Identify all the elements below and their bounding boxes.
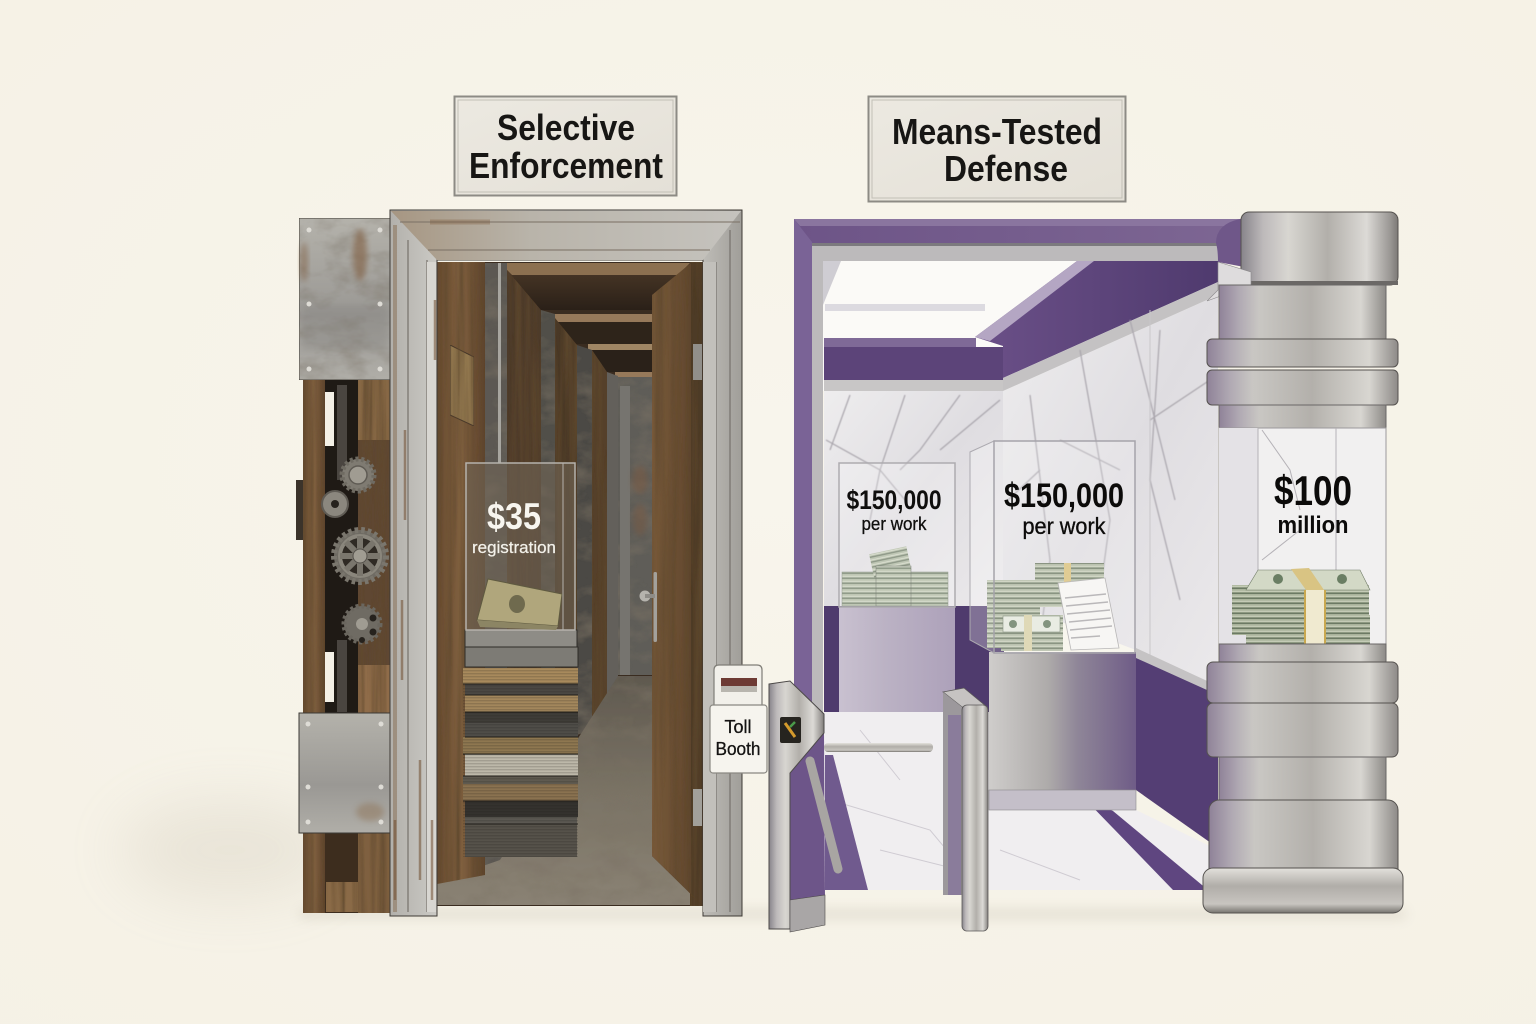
ground shadows (120, 800, 1405, 918)
glass case (839, 463, 955, 607)
upper neck (1219, 285, 1386, 339)
heading sign: Selective Enforcement: Selective (497, 107, 635, 148)
toll turnstile left body (769, 681, 933, 932)
metal plinth (465, 630, 578, 667)
money bundles (1232, 568, 1370, 655)
back money stacks (987, 563, 1104, 648)
exhibit: $150,000 per work large case (970, 441, 1136, 810)
open wooden door leaf (640, 262, 704, 906)
value label: per work (1022, 513, 1106, 539)
wooden backing and dark mechanism gap (296, 380, 390, 913)
back marble wall (824, 391, 1003, 607)
toll booth sign: Booth (716, 739, 760, 759)
corridor side walls and columns (485, 263, 618, 875)
panel: vault door edge with exposed gears (296, 218, 390, 913)
panel: weathered door frame (390, 210, 742, 916)
value label: $35 (487, 496, 541, 537)
skylight ceiling (823, 261, 1218, 391)
heading sign: Means-Tested Defense: Means-Tested (892, 111, 1102, 152)
value label (472, 496, 556, 557)
panel: marble lobby interior (823, 261, 1218, 890)
marble floor (824, 712, 1218, 890)
silver ceiling edge (1003, 282, 1218, 391)
value label (1004, 477, 1124, 539)
heading sign: Selective Enforcement: Enforcement (469, 145, 663, 186)
value label (1274, 467, 1352, 539)
value label: registration (472, 538, 556, 557)
bottom steel plate (299, 713, 390, 833)
money pile (842, 546, 948, 606)
front money stack (1001, 615, 1063, 651)
marble veins (826, 320, 1210, 640)
heading sign: Means-Tested Defense: Defense (944, 148, 1068, 189)
turnstile display (780, 717, 801, 743)
purple wedge joining frame (1216, 219, 1260, 270)
gears (322, 459, 386, 643)
value label: $150,000 (846, 485, 942, 515)
toll booth sign: Toll (724, 717, 752, 737)
value label: $100 (1274, 467, 1352, 514)
turnstile right post (943, 688, 988, 931)
glass case (466, 463, 575, 630)
left wood wall (437, 262, 485, 884)
turnstile lower arm (810, 761, 838, 869)
exhibit: $35 registration (463, 463, 578, 857)
panel: purple entrance frame (794, 219, 1240, 905)
value label (846, 485, 942, 534)
ceiling receding (500, 263, 690, 377)
heading sign: Selective Enforcement (454, 96, 676, 196)
pedestal (839, 607, 955, 712)
exhibit: $150,000 per work small case (839, 463, 955, 712)
concrete floor (437, 676, 702, 905)
upper bands (1207, 339, 1398, 428)
panel: old wooden corridor interior (436, 262, 704, 906)
value label: million (1278, 512, 1348, 539)
stack of worn books (463, 668, 578, 857)
heading sign: Means-Tested Defense (868, 96, 1126, 202)
column glass (1219, 428, 1386, 648)
far steel door (618, 377, 652, 675)
marble panel seam (1149, 310, 1151, 660)
right marble wall (1003, 295, 1218, 690)
purple ceiling beams (824, 261, 1218, 391)
purple wainscot (824, 606, 1218, 848)
base tiers (1203, 644, 1403, 913)
pedestal (989, 652, 1136, 810)
value label: per work (862, 514, 927, 534)
wall notice plank (450, 345, 474, 426)
toll booth sign (710, 665, 767, 773)
glass case (970, 441, 1135, 653)
legal document (1058, 578, 1119, 650)
value label: $150,000 (1004, 477, 1124, 515)
top cap (1207, 212, 1398, 301)
purple floor stripes (825, 755, 1208, 890)
top steel plate (299, 218, 390, 380)
dollar bills (477, 579, 562, 630)
turnstile horizontal bar (824, 743, 933, 752)
panel: chrome column with $100 million (1203, 212, 1403, 913)
